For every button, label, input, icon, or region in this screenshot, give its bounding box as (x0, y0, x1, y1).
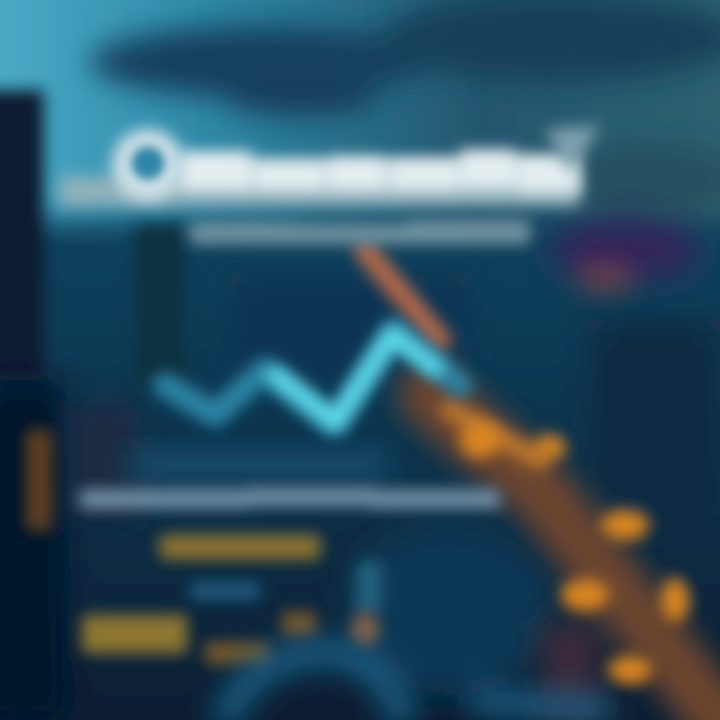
orange diagonal trend line (365, 250, 720, 720)
title band (illegible in reference) (60, 125, 600, 206)
yellow text band upper (illegible in reference) (160, 535, 320, 559)
caption row (illegible in reference) (80, 450, 500, 508)
small blue label (illegible in reference) (190, 582, 260, 600)
cyan zigzag line chart (165, 330, 460, 425)
orange light spots (460, 422, 689, 684)
bottom circular gauge (225, 652, 610, 720)
storm clouds (90, 0, 720, 216)
orange left window glow (26, 430, 52, 530)
small orange marker (351, 562, 381, 646)
purple building glow (550, 218, 700, 289)
subtitle band (illegible in reference) (190, 220, 530, 244)
title circle icon (112, 129, 184, 201)
yellow text band lower (illegible in reference) (82, 612, 316, 664)
